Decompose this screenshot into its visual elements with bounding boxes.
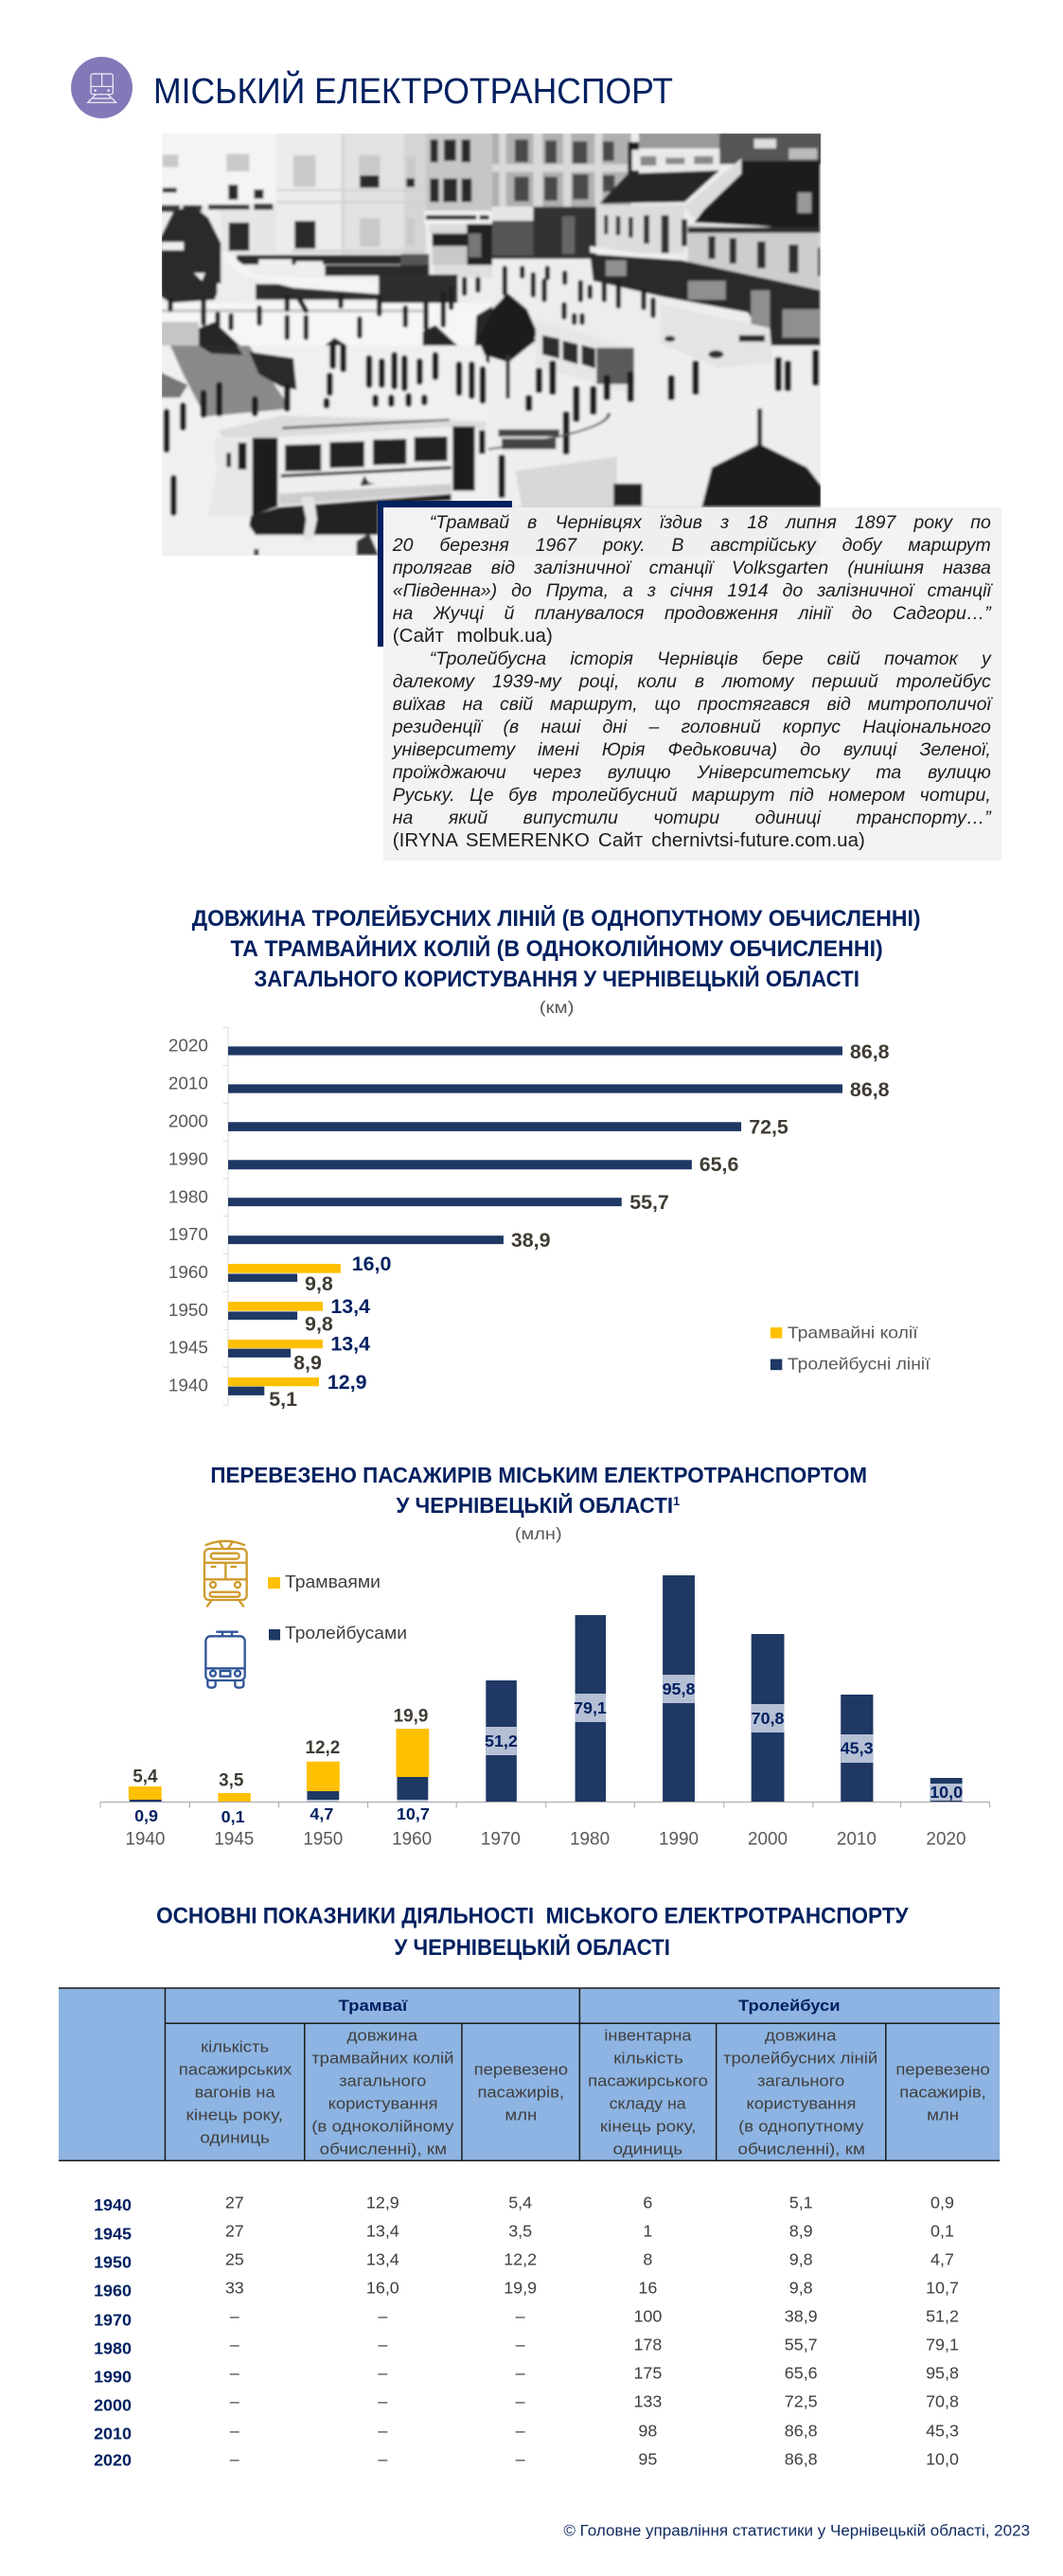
table header: перевезено xyxy=(474,2060,568,2078)
quote text block: на який випустили чотири одиниці транспорту…” xyxy=(393,808,991,828)
legend: chart 1: Трамвайні колії xyxy=(788,1324,918,1342)
unit label: km: (км) xyxy=(540,998,575,1017)
table header: довжина xyxy=(765,2026,837,2044)
table body: 45,3 xyxy=(926,2421,959,2440)
table header: пасажирських xyxy=(179,2060,292,2078)
table header: млн xyxy=(505,2105,537,2123)
table body: 86,8 xyxy=(785,2421,818,2440)
table body: – xyxy=(516,2392,525,2411)
legend: chart 1 xyxy=(771,1324,930,1374)
table body: – xyxy=(230,2421,239,2440)
table body: – xyxy=(230,2336,239,2354)
bar chart: length of trolleybus lines and tram tracks: 65,6 xyxy=(700,1153,739,1176)
table body: 79,1 xyxy=(926,2336,959,2354)
bar chart: length of trolleybus lines and tram tracks: 9,8 xyxy=(305,1313,333,1336)
table body: 1960 xyxy=(94,2281,132,2300)
quote text block: університету імені Юрія Федьковича) до вулиці Зеленої, xyxy=(393,739,991,760)
table header: складу на xyxy=(610,2094,686,2112)
table body: 8 xyxy=(643,2250,652,2269)
stacked bar chart: passengers carried: 5,4 xyxy=(133,1768,158,1787)
bar chart: length of trolleybus lines and tram tracks: 1940 xyxy=(168,1376,208,1395)
table body: 27 xyxy=(225,2194,244,2212)
table body: 1 xyxy=(643,2222,652,2241)
table header: одиниць xyxy=(612,2140,682,2158)
table body: 2020 xyxy=(94,2450,132,2469)
quote text block: на Жучці й планувалося продовження лінії до Садгори…” xyxy=(393,603,991,624)
quote text block xyxy=(392,512,993,851)
table body: 95,8 xyxy=(926,2364,959,2383)
bar chart: length of trolleybus lines and tram tracks: 1945 xyxy=(168,1339,208,1359)
table body: 6 xyxy=(643,2194,652,2212)
stacked bar chart: passengers carried: 70,8 xyxy=(752,1709,785,1728)
table body: 10,7 xyxy=(926,2279,959,2298)
table body: 133 xyxy=(633,2392,662,2411)
quote text block: (IRYNA SEMERENKO Сайт chernivtsi-future.com.ua) xyxy=(393,829,865,851)
table header: користування xyxy=(746,2094,856,2112)
table body: 0,1 xyxy=(930,2222,954,2241)
table header: одиниць xyxy=(200,2128,270,2146)
stacked bar chart: passengers carried: 1960 xyxy=(392,1830,432,1850)
table header: вагонів на xyxy=(195,2083,275,2101)
bar chart: length of trolleybus lines and tram tracks: 13,4 xyxy=(330,1333,370,1356)
stacked bar chart: passengers carried: 0,1 xyxy=(221,1807,245,1826)
table body: 70,8 xyxy=(926,2392,959,2411)
bar chart: length of trolleybus lines and tram tracks: 2000 xyxy=(168,1111,208,1131)
table header: кінець року, xyxy=(186,2105,283,2123)
table body: 1990 xyxy=(94,2368,132,2387)
table body: 16,0 xyxy=(366,2279,399,2298)
legend: trams: Трамваями xyxy=(285,1572,381,1591)
table header: кількість xyxy=(201,2037,269,2055)
table body: 5,1 xyxy=(789,2194,813,2212)
table body: 9,8 xyxy=(789,2279,813,2298)
quote text block: “Трамвай в Чернівцях їздив з 18 липня 1897 року по xyxy=(430,512,991,533)
quote text block: пролягав від залізничної станції Volksgarten (нинішня назва xyxy=(393,558,991,578)
heading: chart 1: ЗАГАЛЬНОГО КОРИСТУВАННЯ У ЧЕРНІВЕЦЬКІЙ ОБЛАСТІ xyxy=(254,966,859,992)
stacked bar chart: passengers carried: 3,5 xyxy=(219,1771,243,1791)
table header: пасажирів, xyxy=(477,2083,564,2101)
quote text block: 20 березня 1967 року. В австрійську добу маршрут xyxy=(393,535,991,556)
legend: trolleybuses: Тролейбусами xyxy=(285,1624,407,1643)
table body: – xyxy=(516,2307,525,2326)
stacked bar chart: passengers carried: 19,9 xyxy=(394,1707,428,1727)
stacked bar chart: passengers carried: 1945 xyxy=(214,1830,254,1850)
table header: млн xyxy=(927,2105,959,2123)
table body: 13,4 xyxy=(366,2250,399,2269)
table body: 33 xyxy=(225,2279,244,2298)
bar chart: length of trolleybus lines and tram tracks: 1990 xyxy=(168,1149,208,1169)
table body: 178 xyxy=(633,2336,662,2354)
table body: – xyxy=(516,2336,525,2354)
stacked bar chart: passengers carried: 95,8 xyxy=(663,1679,695,1698)
table body: 98 xyxy=(638,2421,657,2440)
stacked bar chart: passengers carried xyxy=(100,1575,989,1850)
table body: 1950 xyxy=(94,2252,132,2271)
table header: (в однопутному xyxy=(738,2117,864,2135)
table body: – xyxy=(378,2449,387,2468)
heading: chart 1 xyxy=(192,905,921,992)
table body: 9,8 xyxy=(789,2250,813,2269)
table header: користування xyxy=(328,2094,438,2112)
heading: table: ОСНОВНІ ПОКАЗНИКИ ДІЯЛЬНОСТІ МІСЬКОГО ЕЛЕКТРОТРАНСПОРТУ xyxy=(156,1904,910,1929)
table header: (в одноколійному xyxy=(311,2117,454,2135)
table body: – xyxy=(230,2449,239,2468)
icon: train in purple circle xyxy=(71,57,133,118)
table body: 13,4 xyxy=(366,2222,399,2241)
table header: Тролейбуси xyxy=(738,1997,841,2015)
stacked bar chart: passengers carried: 0,9 xyxy=(134,1806,158,1825)
bar chart: length of trolleybus lines and tram tracks: 9,8 xyxy=(305,1272,333,1295)
table body: – xyxy=(378,2336,387,2354)
bar chart: length of trolleybus lines and tram tracks: 2020 xyxy=(168,1037,208,1057)
table body: 86,8 xyxy=(785,2449,818,2468)
quote text block: «Південна») до Прута, а з січня 1914 до залізничної станції xyxy=(393,580,991,601)
table body: – xyxy=(230,2307,239,2326)
heading: table: У ЧЕРНІВЕЦЬКІЙ ОБЛАСТІ xyxy=(394,1934,670,1961)
table body: 16 xyxy=(638,2279,657,2298)
bar chart: length of trolleybus lines and tram tracks: 5,1 xyxy=(269,1388,297,1411)
table body: 1945 xyxy=(94,2224,132,2243)
quote text block: (Сайт molbuk.ua) xyxy=(393,625,553,647)
bar chart: length of trolleybus lines and tram tracks: 1970 xyxy=(168,1225,208,1245)
quote text block: “Тролейбусна історія Чернівців бере свій початок у xyxy=(430,648,991,669)
table body: 19,9 xyxy=(504,2279,537,2298)
table body: 5,4 xyxy=(508,2194,532,2212)
stacked bar chart: passengers carried: 1990 xyxy=(659,1830,699,1850)
heading: chart 2: ПЕРЕВЕЗЕНО ПАСАЖИРІВ МІСЬКИМ ЕЛЕКТРОТРАНСПОРТОМ xyxy=(210,1463,867,1487)
bar chart: length of trolleybus lines and tram tracks: 1950 xyxy=(168,1301,208,1321)
table body: 38,9 xyxy=(785,2307,818,2326)
bar chart: length of trolleybus lines and tram tracks: 16,0 xyxy=(352,1252,391,1275)
stacked bar chart: passengers carried: 45,3 xyxy=(841,1739,874,1758)
bar chart: length of trolleybus lines and tram tracks: 1980 xyxy=(168,1187,208,1207)
table header: перевезено xyxy=(895,2060,990,2078)
table header: кількість xyxy=(613,2049,683,2067)
table body: 95 xyxy=(638,2449,657,2468)
table body: 2000 xyxy=(94,2396,132,2415)
stacked bar chart: passengers carried: 4,7 xyxy=(310,1804,333,1823)
table body: 25 xyxy=(225,2250,244,2269)
bar chart: length of trolleybus lines and tram tracks: 86,8 xyxy=(850,1040,890,1063)
table header: пасажирів, xyxy=(899,2083,986,2101)
footer: copyright: © Головне управління статистики у Чернівецькій області, 2023 xyxy=(563,2522,1030,2540)
heading: chart 1: ДОВЖИНА ТРОЛЕЙБУСНИХ ЛІНІЙ (В ОДНОПУТНОМУ ОБЧИСЛЕННІ) xyxy=(192,905,921,932)
heading: table xyxy=(156,1904,910,1961)
table body: 27 xyxy=(225,2222,244,2241)
legend: chart 1: Тролейбусні лінії xyxy=(788,1355,930,1374)
table body: – xyxy=(516,2364,525,2383)
quote text block: виїхав на свій маршрут, що простягався від митрополичої xyxy=(393,694,991,715)
icon: tram xyxy=(204,1541,247,1607)
table header: обчисленні), км xyxy=(738,2140,865,2158)
stacked bar chart: passengers carried: 1950 xyxy=(303,1830,343,1850)
stacked bar chart: passengers carried: 1940 xyxy=(125,1830,165,1850)
bar chart: length of trolleybus lines and tram tracks xyxy=(168,1027,890,1411)
table body: – xyxy=(378,2307,387,2326)
table body: 10,0 xyxy=(926,2449,959,2468)
bar chart: length of trolleybus lines and tram tracks: 13,4 xyxy=(330,1295,370,1318)
stacked bar chart: passengers carried: 1980 xyxy=(570,1830,610,1850)
table body: – xyxy=(230,2392,239,2411)
table body: 12,2 xyxy=(504,2250,537,2269)
table body: 72,5 xyxy=(785,2392,818,2411)
stacked bar chart: passengers carried: 2020 xyxy=(926,1830,966,1850)
stacked bar chart: passengers carried: 1970 xyxy=(481,1830,521,1850)
table body: – xyxy=(230,2364,239,2383)
stacked bar chart: passengers carried: 10,7 xyxy=(397,1804,430,1823)
stacked bar chart: passengers carried: 51,2 xyxy=(485,1732,518,1750)
table body: 12,9 xyxy=(366,2194,399,2212)
table body: 4,7 xyxy=(930,2250,954,2269)
table body: 8,9 xyxy=(789,2222,813,2241)
table header: обчисленні), км xyxy=(320,2140,447,2158)
quote text block: проїжджаючи через вулицю Університетську та вулицю xyxy=(393,762,991,783)
table body: 55,7 xyxy=(785,2336,818,2354)
table header: загального xyxy=(339,2071,426,2089)
table body: 1970 xyxy=(94,2311,132,2330)
table body xyxy=(94,2194,959,2469)
table header xyxy=(59,1988,1000,2160)
bar chart: length of trolleybus lines and tram tracks: 12,9 xyxy=(328,1371,367,1394)
heading: chart 2: 1 xyxy=(673,1494,680,1508)
table header: пасажирського xyxy=(588,2071,708,2089)
table header: кінець року, xyxy=(600,2117,696,2135)
quote panel: background and accent corner xyxy=(378,501,1001,861)
stacked bar chart: passengers carried: 2000 xyxy=(748,1830,788,1850)
stacked bar chart: passengers carried: 12,2 xyxy=(305,1738,340,1758)
table header: Трамваї xyxy=(339,1997,409,2015)
bar chart: length of trolleybus lines and tram tracks: 86,8 xyxy=(850,1078,890,1101)
bar chart: length of trolleybus lines and tram tracks: 55,7 xyxy=(629,1191,669,1214)
unit label: million: (млн) xyxy=(515,1524,562,1543)
bar chart: length of trolleybus lines and tram tracks: 8,9 xyxy=(293,1352,322,1375)
quote text block: далекому 1939-му році, коли в лютому перший тролейбус xyxy=(393,671,991,692)
heading: chart 2 xyxy=(210,1463,867,1518)
bar chart: length of trolleybus lines and tram tracks: 38,9 xyxy=(511,1229,551,1252)
photo: tram and trolleybuses on a city square xyxy=(161,133,824,559)
table body: 3,5 xyxy=(508,2222,532,2241)
stacked bar chart: passengers carried: 79,1 xyxy=(574,1698,607,1717)
table body: 100 xyxy=(633,2307,662,2326)
table body: – xyxy=(378,2364,387,2383)
bar chart: length of trolleybus lines and tram tracks: 72,5 xyxy=(749,1116,788,1139)
title: МІСЬКИЙ ЕЛЕКТРОТРАНСПОРТ xyxy=(153,69,673,112)
table body: – xyxy=(516,2449,525,2468)
table body: 2010 xyxy=(94,2425,132,2443)
bar chart: length of trolleybus lines and tram tracks: 1960 xyxy=(168,1263,208,1283)
table body: – xyxy=(378,2392,387,2411)
table body: – xyxy=(378,2421,387,2440)
table body: 0,9 xyxy=(930,2194,954,2212)
stacked bar chart: passengers carried: 10,0 xyxy=(930,1783,963,1802)
table header: інвентарна xyxy=(604,2026,692,2044)
table body: 175 xyxy=(633,2364,662,2383)
table body: 1940 xyxy=(94,2195,132,2214)
quote text block: Руську. Це був тролейбусний маршрут під номером чотири, xyxy=(393,785,991,806)
heading: chart 2: У ЧЕРНІВЕЦЬКІЙ ОБЛАСТІ xyxy=(396,1493,673,1518)
table body: 51,2 xyxy=(926,2307,959,2326)
heading: chart 1: ТА ТРАМВАЙНИХ КОЛІЙ (В ОДНОКОЛІЙНОМУ ОБЧИСЛЕННІ) xyxy=(230,935,883,962)
table header: трамвайних колій xyxy=(311,2049,453,2067)
table body: 65,6 xyxy=(785,2364,818,2383)
stacked bar chart: passengers carried: 2010 xyxy=(837,1830,877,1850)
bar chart: length of trolleybus lines and tram tracks: 2010 xyxy=(168,1075,208,1094)
table header: тролейбусних ліній xyxy=(723,2049,877,2067)
table body: – xyxy=(516,2421,525,2440)
table body: 1980 xyxy=(94,2339,132,2358)
table header: довжина xyxy=(347,2026,418,2044)
table header: загального xyxy=(757,2071,844,2089)
icon: trolleybus xyxy=(205,1632,245,1688)
quote text block: резиденції (в наші дні – головний корпус Національного xyxy=(393,717,991,737)
